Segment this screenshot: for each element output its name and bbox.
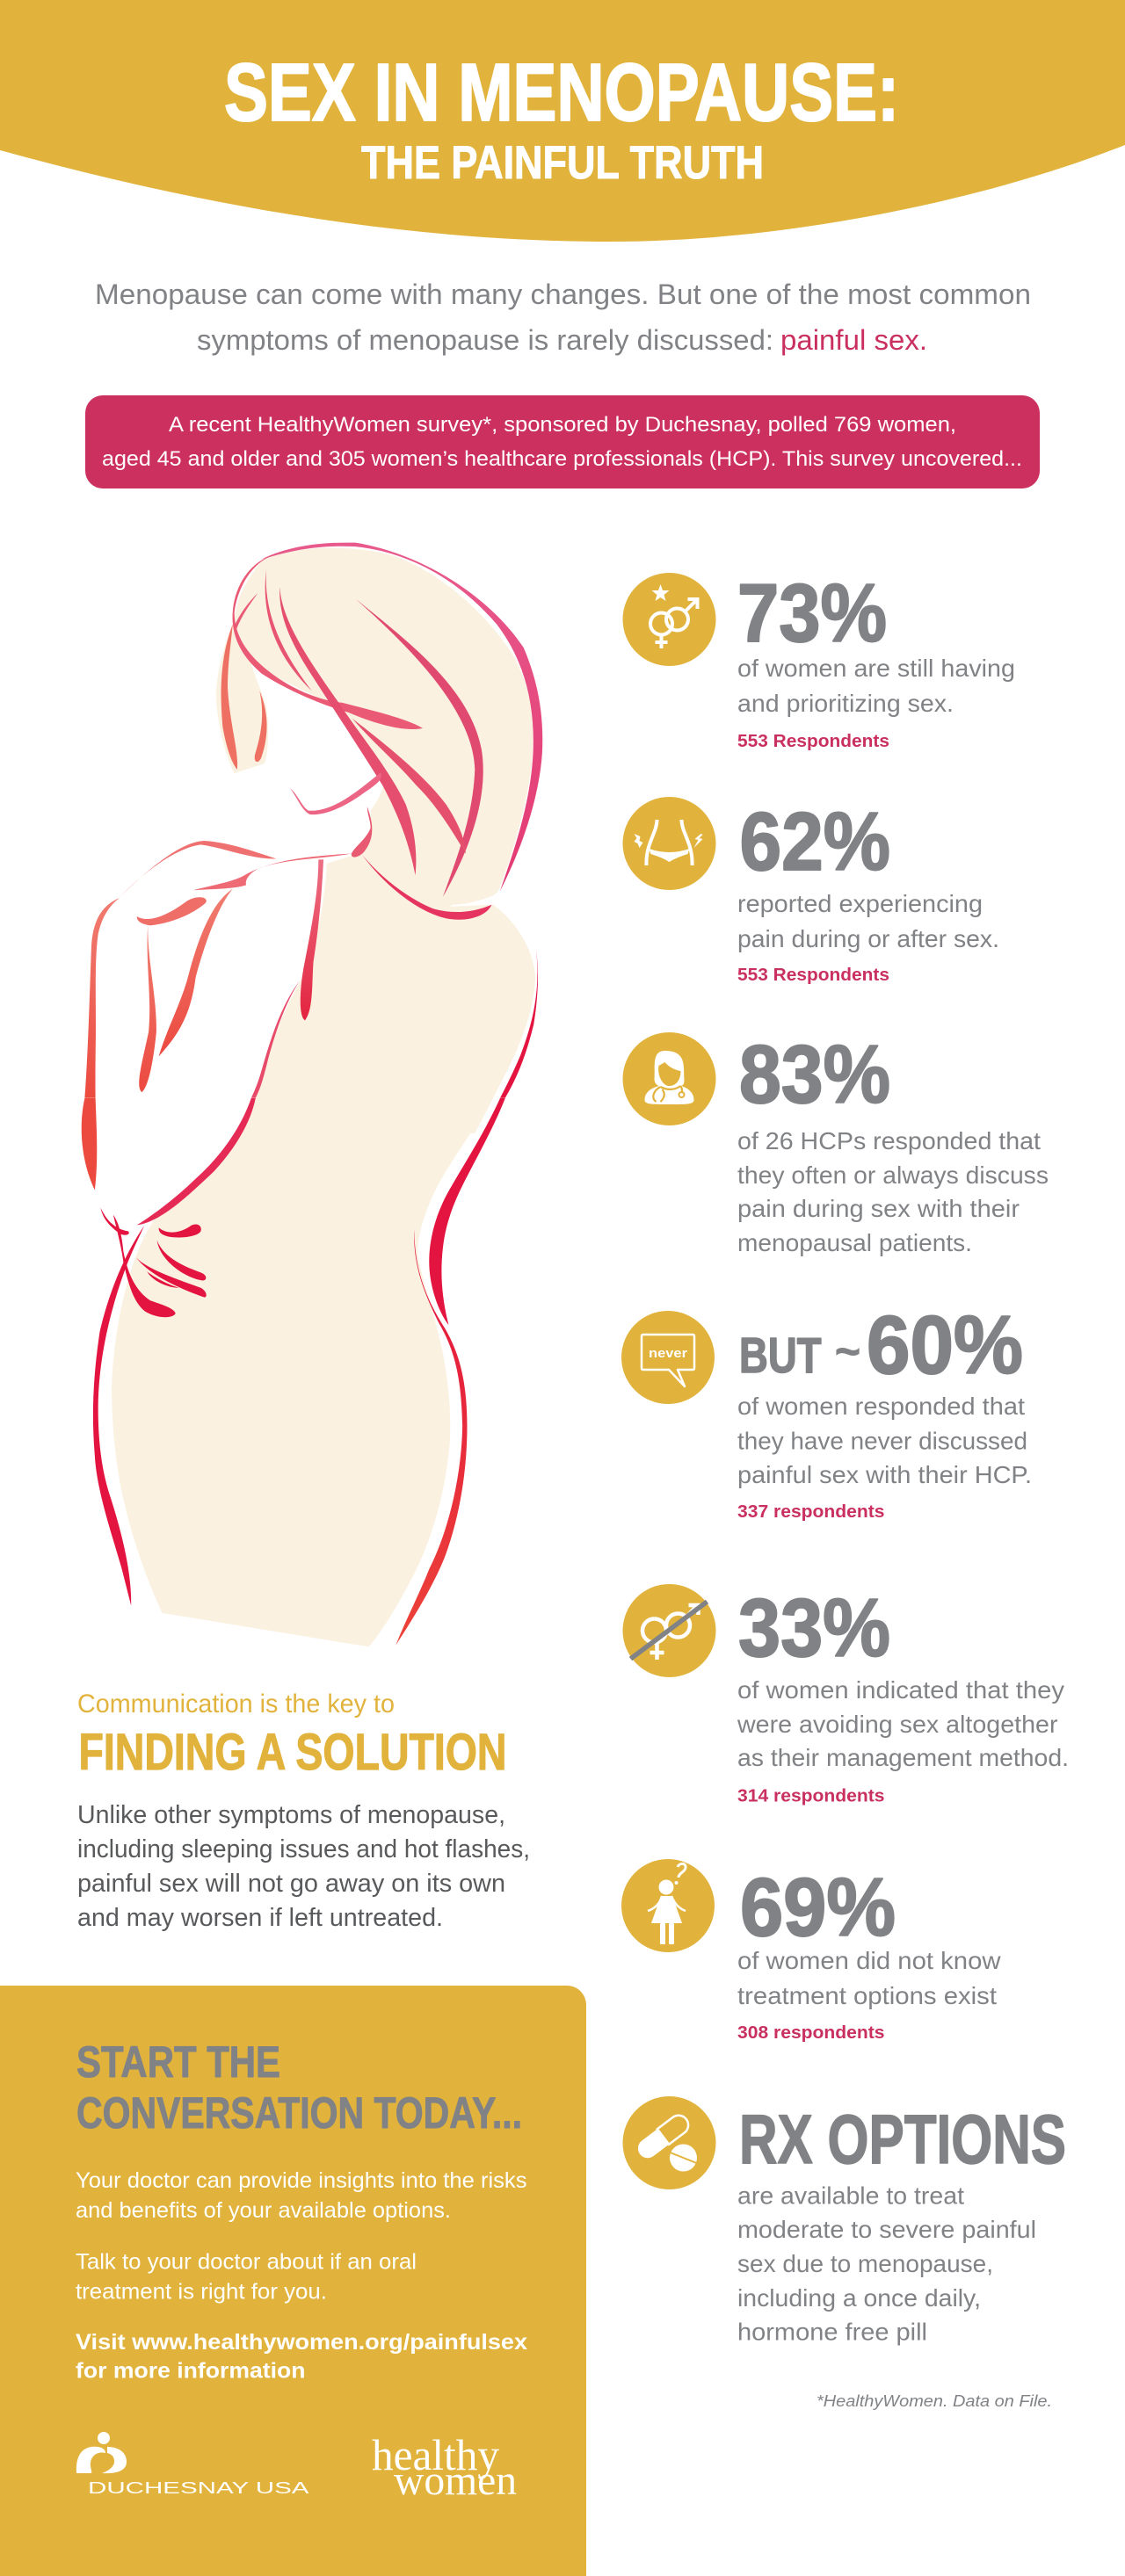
stat: 73% [622, 567, 1015, 751]
footnote: *HealthyWomen. Data on File. [817, 2392, 1052, 2410]
title: THE PAINFUL TRUTH [361, 137, 764, 189]
logo: Duchesnay USA [76, 2432, 308, 2497]
panel body text: for more information [76, 2358, 306, 2383]
stat: Rx options: hormone free pill [737, 2318, 927, 2346]
stat: 62%: pain during or after sex. [737, 925, 999, 952]
logo: HealthyWomen: healthy [372, 2430, 499, 2479]
heading: START THE [76, 2037, 280, 2087]
text block: finding a solution: painful sex will not go away on its own [77, 1870, 505, 1898]
stat: 33% [622, 1581, 1069, 1806]
stat: 83%: of 26 HCPs responded that [737, 1127, 1041, 1154]
illustration: woman figure [82, 543, 542, 1646]
intro text: symptoms of menopause is rarely discussed: [197, 324, 773, 356]
logo: HealthyWomen [372, 2430, 517, 2504]
stat: Rx options: moderate to severe painful [737, 2216, 1036, 2243]
stat: 62%: reported experiencing [737, 890, 983, 917]
title: SEX IN MENOPAUSE: [224, 47, 899, 138]
icon: never speech bubble: never [649, 1346, 687, 1361]
panel body text: Visit www.healthywomen.org/painfulsex [76, 2330, 527, 2355]
stat: Rx options: sex due to menopause, [737, 2250, 993, 2277]
icon: pelvis with pain bolts [622, 797, 715, 890]
stat: Rx options: including a once daily, [737, 2284, 981, 2312]
stat: 83%: 83% [739, 1028, 890, 1120]
text block: finding a solution: Communication is the key to [77, 1690, 395, 1719]
stat: but ~60%: they have never discussed [737, 1427, 1027, 1455]
stat: 69% [621, 1859, 1001, 2043]
icon: gender symbols with star [622, 573, 715, 666]
stat: but ~60%: ~ [835, 1327, 860, 1376]
stat: 33%: were avoiding sex altogether [737, 1711, 1058, 1738]
logo: Duchesnay USA: DUCHESNAY USA [88, 2479, 309, 2497]
survey callout: A recent HealthyWomen survey*, sponsored by Duchesnay, polled 769 women, [169, 413, 956, 437]
intro text [95, 279, 1031, 356]
stat: Rx options: are available to treat [737, 2182, 964, 2209]
stat: but ~60%: BUT [739, 1328, 822, 1384]
panel body text: Talk to your doctor about if an oral [76, 2249, 417, 2274]
icon: crossed gender symbols [622, 1584, 715, 1677]
stat: but ~60%: 60% [867, 1299, 1023, 1391]
stat: 33%: 314 respondents [737, 1787, 884, 1806]
stat: 69%: treatment options exist [737, 1982, 997, 2009]
stat: 83%: they often or always discuss [737, 1161, 1049, 1189]
stat: 69%: 69% [740, 1861, 896, 1953]
stat: 33%: of women indicated that they [737, 1676, 1064, 1704]
stat: 62%: 62% [740, 795, 890, 887]
text block: finding a solution: and may worsen if left untreated. [77, 1904, 443, 1932]
header banner [0, 0, 1125, 242]
stat: 33%: as their management method. [737, 1744, 1069, 1771]
title [224, 47, 899, 189]
stat: 69%: 308 respondents [737, 2023, 884, 2043]
icon: female doctor [622, 1032, 715, 1125]
stat: Rx options [622, 2096, 1066, 2346]
stat: 83%: menopausal patients. [737, 1229, 972, 1256]
survey callout [85, 395, 1040, 488]
text block: finding a solution: Unlike other symptoms of menopause, [77, 1801, 505, 1829]
icon: confused woman [621, 1859, 715, 1952]
stat: 62% [622, 795, 999, 985]
stat: 62%: 553 Respondents [737, 966, 889, 985]
stat: 73%: 73% [737, 567, 887, 659]
logo: HealthyWomen: women [394, 2457, 517, 2504]
survey callout: aged 45 and older and 305 women’s healthcare professionals (HCP). This survey uncovered... [102, 447, 1022, 471]
panel body text: Your doctor can provide insights into the risks [76, 2168, 527, 2193]
stat: 73%: 553 Respondents [737, 732, 889, 751]
text block: finding a solution [77, 1690, 530, 1932]
panel body text: and benefits of your available options. [76, 2198, 451, 2223]
heading [76, 2037, 522, 2138]
panel body text [76, 2168, 527, 2383]
stat: but ~60%: of women responded that [737, 1393, 1025, 1420]
icon: capsule and tablet [622, 2096, 715, 2189]
panel body text: treatment is right for you. [76, 2279, 327, 2304]
stat: 73%: of women are still having [737, 655, 1015, 682]
text block: finding a solution: including sleeping issues and hot flashes, [77, 1835, 530, 1863]
text block: finding a solution: FINDING A SOLUTION [79, 1724, 506, 1781]
stat: but ~60%: 337 respondents [737, 1502, 884, 1522]
heading: CONVERSATION TODAY... [76, 2088, 522, 2138]
stat: 83%: pain during sex with their [737, 1195, 1020, 1222]
stat: 73%: and prioritizing sex. [737, 690, 954, 717]
stat: but ~60%: painful sex with their HCP. [737, 1461, 1032, 1488]
icon: never speech bubble [621, 1311, 715, 1404]
stat: 33%: 33% [738, 1581, 890, 1674]
panel: start the conversation [0, 1986, 586, 2576]
intro text: painful sex. [780, 324, 927, 356]
intro text: Menopause can come with many changes. But one of the most common [95, 279, 1031, 310]
stat: 69%: of women did not know [737, 1947, 1001, 1974]
stat: 83% [622, 1028, 1049, 1256]
stat: but ~60% [621, 1299, 1032, 1522]
